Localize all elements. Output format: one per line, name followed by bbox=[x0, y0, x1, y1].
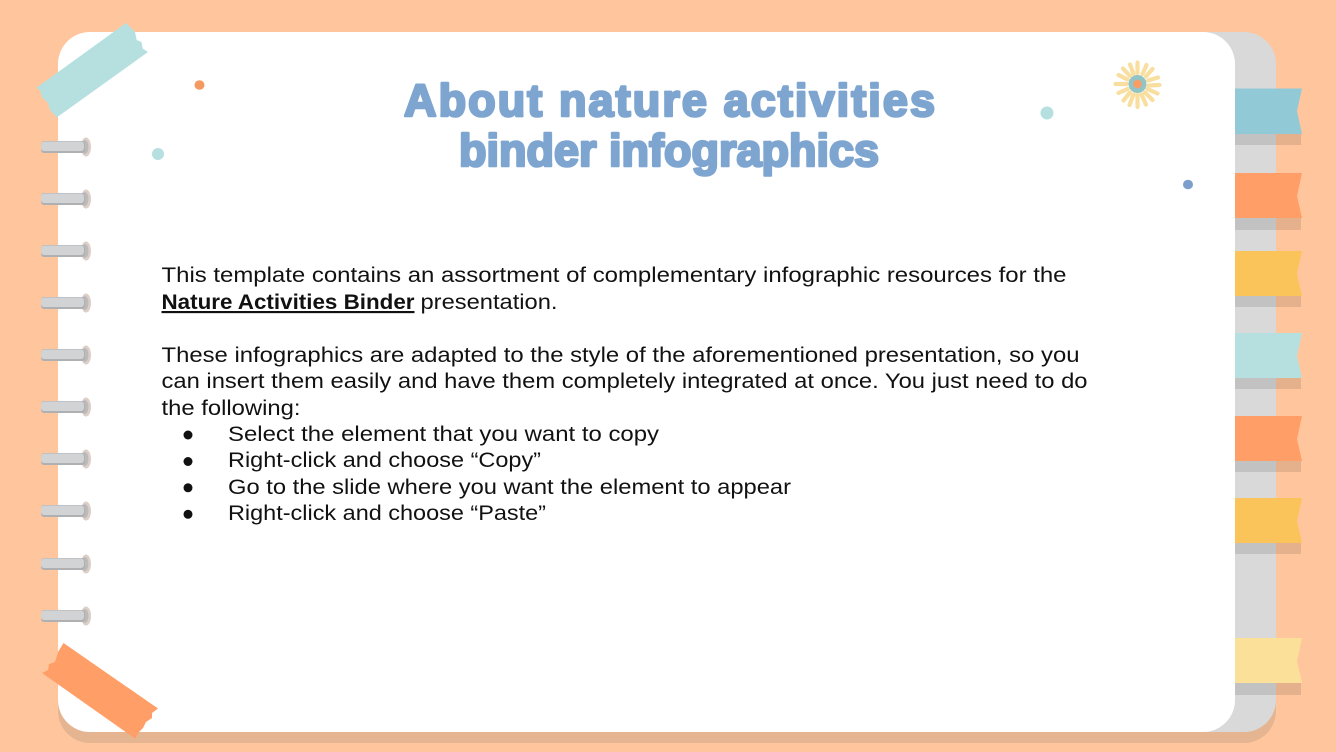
instructions paragraph: the following: bbox=[162, 396, 300, 420]
tab 4 bbox=[1235, 333, 1302, 378]
dot: teal right bbox=[1040, 106, 1054, 120]
title bbox=[404, 75, 935, 176]
ring 4 bbox=[41, 294, 91, 312]
washi tape: teal bbox=[36, 23, 148, 118]
ring 5 bbox=[41, 346, 91, 364]
step 1: Select the element that you want to copy bbox=[228, 422, 659, 446]
icon: daisy flower bbox=[1116, 62, 1160, 107]
dot: blue bbox=[1183, 180, 1193, 189]
tab 6 bbox=[1235, 498, 1302, 543]
intro paragraph: presentation. bbox=[420, 290, 558, 314]
title: binder infographics bbox=[459, 125, 879, 176]
title: About nature activities bbox=[404, 75, 935, 126]
ring 2 bbox=[41, 190, 91, 208]
tab 1 shadow bbox=[1235, 134, 1301, 145]
tab 5 shadow bbox=[1235, 461, 1301, 472]
steps list bbox=[184, 422, 791, 525]
ring 3 bbox=[41, 242, 91, 260]
tab 5 bbox=[1235, 416, 1302, 461]
ring 1 bbox=[41, 138, 91, 156]
tab 3 shadow bbox=[1235, 296, 1301, 307]
tab 2 shadow bbox=[1235, 218, 1301, 230]
ring 10 bbox=[41, 606, 91, 626]
step 4: Right-click and choose “Paste” bbox=[228, 501, 546, 525]
instructions paragraph bbox=[162, 343, 1088, 420]
step 3: Go to the slide where you want the element to appear bbox=[228, 475, 791, 499]
tab 6 shadow bbox=[1235, 543, 1301, 554]
intro paragraph: This template contains an assortment of complementary infographic resources for the bbox=[162, 263, 1066, 287]
step 2: Right-click and choose “Copy” bbox=[228, 448, 541, 472]
tab 7 bbox=[1235, 638, 1302, 683]
tab 4 shadow bbox=[1235, 378, 1301, 389]
washi tape: orange bbox=[42, 643, 158, 738]
tab 1 bbox=[1235, 88, 1302, 134]
ring 6 bbox=[41, 398, 91, 416]
ring 8 bbox=[41, 502, 91, 520]
ring 7 bbox=[41, 450, 91, 468]
tab 7 shadow bbox=[1235, 683, 1301, 695]
dot: orange bbox=[194, 80, 204, 90]
instructions paragraph: These infographics are adapted to the style of the aforementioned presentation, so you bbox=[162, 343, 1080, 367]
instructions paragraph: can insert them easily and have them completely integrated at once. You just need to do bbox=[162, 369, 1088, 393]
binder rings bbox=[41, 138, 91, 626]
tab 3 bbox=[1235, 251, 1302, 296]
binder back cover bbox=[900, 32, 1276, 732]
tab 2 bbox=[1235, 173, 1302, 218]
intro paragraph: Nature Activities Binder bbox=[162, 290, 415, 314]
ring 9 bbox=[41, 554, 91, 574]
tab dividers bbox=[1235, 88, 1302, 695]
intro paragraph bbox=[162, 263, 1066, 314]
dot: teal left bbox=[152, 148, 164, 160]
